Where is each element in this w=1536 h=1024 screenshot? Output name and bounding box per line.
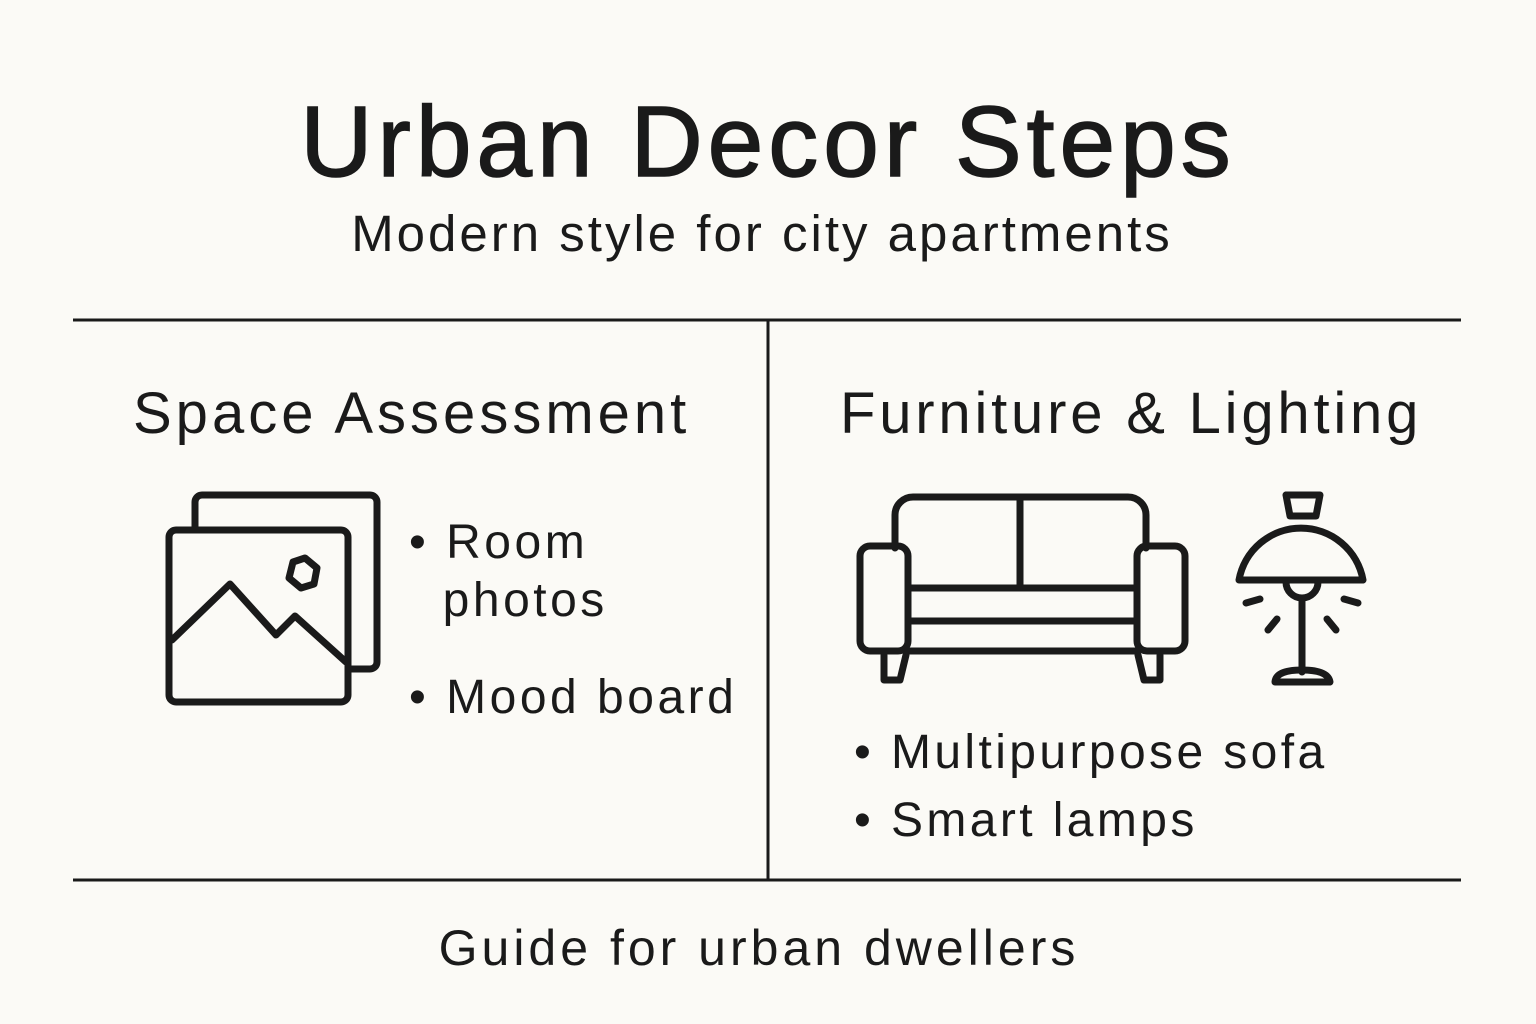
icon: sofa bbox=[856, 494, 1188, 684]
icon: photos bbox=[166, 492, 380, 706]
bullets: furniture & lighting: • Smart lamps bbox=[854, 794, 1198, 847]
panel: space assessment: • Mood board bbox=[409, 671, 737, 724]
bullets: furniture & lighting bbox=[854, 726, 1328, 847]
bullets: furniture & lighting: • Multipurpose sofa bbox=[854, 726, 1328, 779]
title: Urban Decor Steps bbox=[300, 86, 1236, 198]
bullets: space assessment bbox=[409, 516, 608, 627]
heading: furniture & lighting: Furniture & Lighting bbox=[840, 381, 1422, 446]
panel: space assessment bbox=[133, 381, 737, 724]
panel: furniture & lighting bbox=[840, 381, 1422, 847]
bullets: space assessment: photos bbox=[443, 574, 608, 627]
bullets: space assessment: • Room bbox=[409, 516, 588, 569]
footer: Guide for urban dwellers bbox=[439, 920, 1079, 976]
heading: space assessment: Space Assessment bbox=[133, 381, 690, 446]
icon: lamp bbox=[1236, 492, 1366, 686]
subtitle: Modern style for city apartments bbox=[351, 205, 1173, 262]
